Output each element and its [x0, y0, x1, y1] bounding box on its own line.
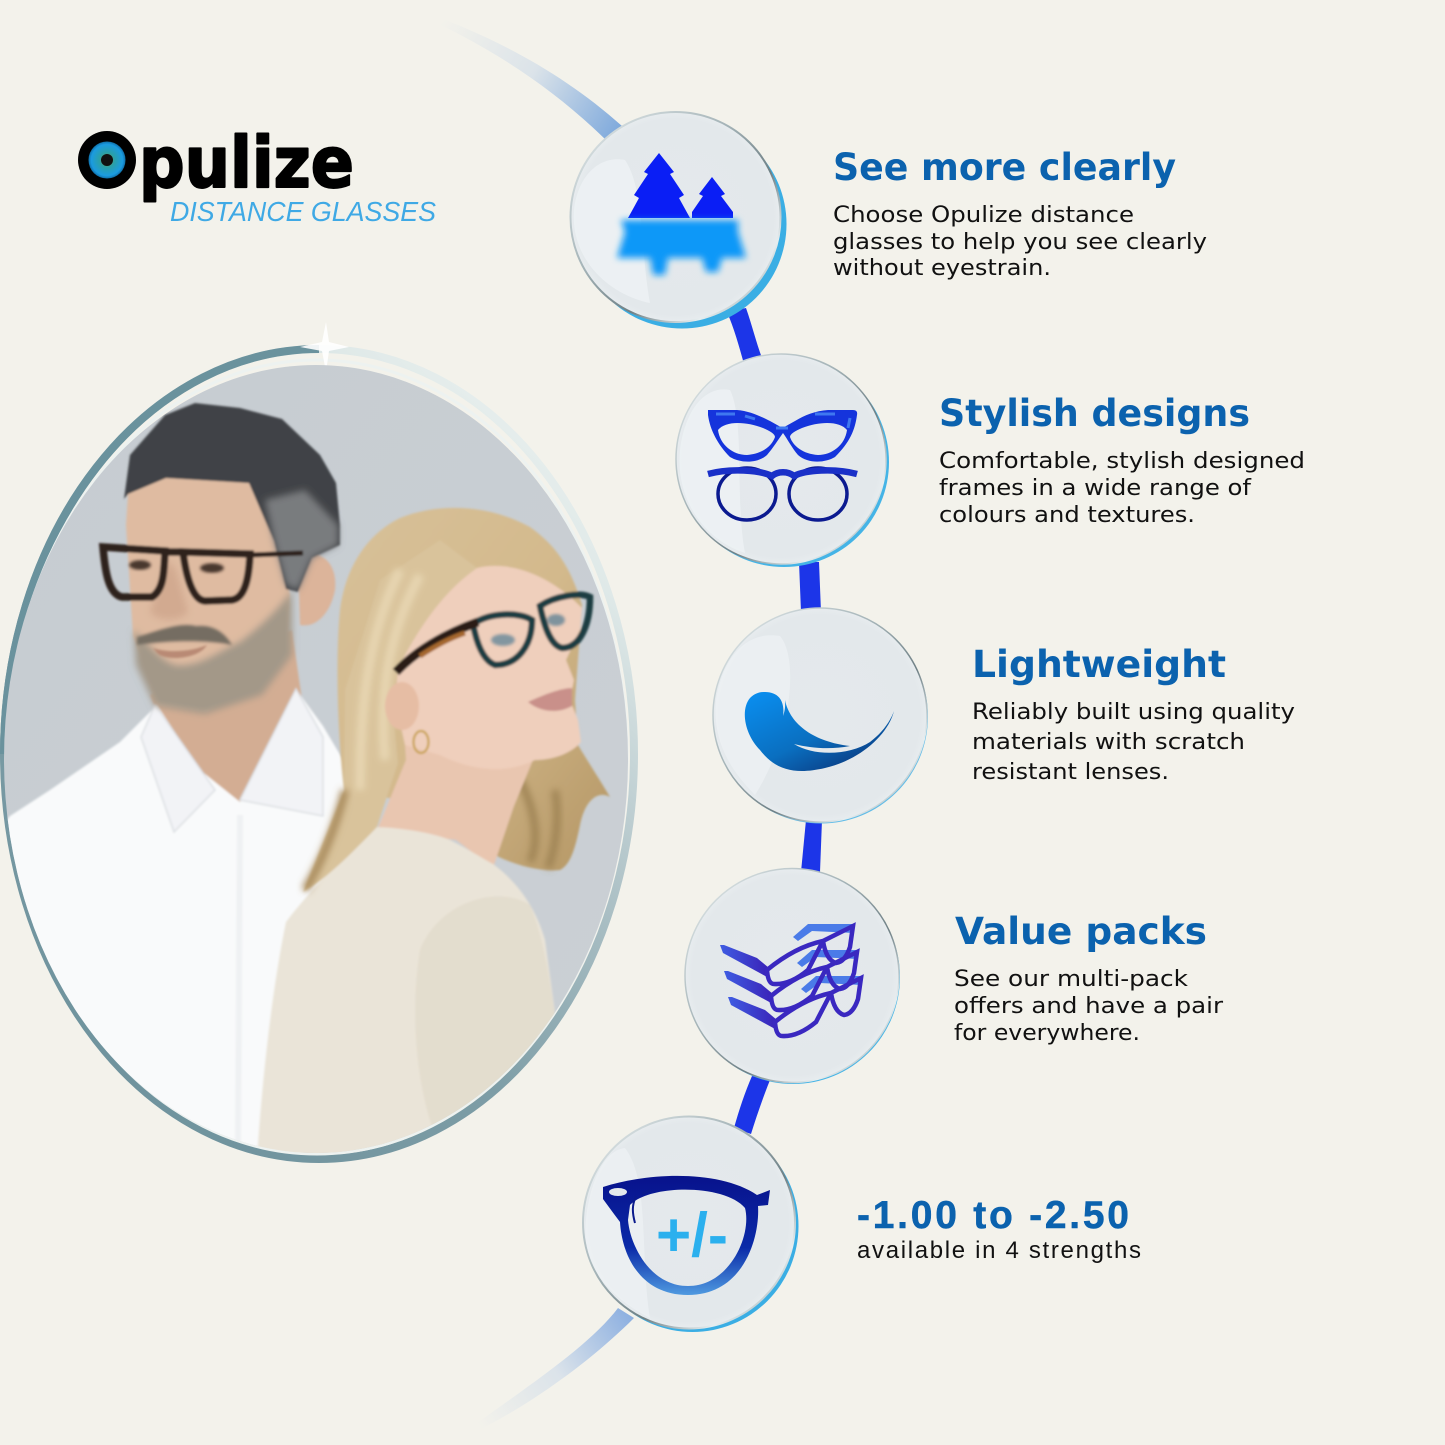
woman	[257, 508, 610, 1160]
icon: glasses with plus minus	[603, 1176, 770, 1295]
lens 1: see more clearly	[570, 112, 786, 328]
icon: cat-eye glasses	[708, 410, 857, 462]
icon: stack of glasses	[720, 924, 862, 1036]
lens 3: lightweight	[713, 608, 928, 824]
lens 2: stylish designs	[676, 354, 889, 567]
man and woman illustration	[0, 403, 610, 1165]
text: value packs body: See our multi-pack	[954, 967, 1188, 992]
arc: top connector fading in	[430, 14, 622, 140]
icon: feather	[745, 692, 894, 771]
connector: lens 3 to lens 4	[801, 820, 822, 872]
heading: see more clearly: See more clearly	[833, 146, 1176, 189]
text: value packs body: for everywhere.	[954, 1021, 1140, 1046]
text: value packs body	[954, 967, 1224, 1046]
text: see more clearly body: Choose Opulize distance	[833, 203, 1134, 228]
heading: strengths range: -1.00 to -2.50	[857, 1194, 1129, 1237]
heading: lightweight: Lightweight	[972, 643, 1226, 686]
text: stylish designs body: colours and textures.	[939, 503, 1195, 528]
icon: glasses with plus minus: +/-	[656, 1201, 728, 1270]
connector: lens 4 to lens 5	[734, 1076, 770, 1134]
icon: eye in logo O	[78, 131, 136, 189]
icon: sharp and blurred trees	[617, 153, 746, 275]
photo background	[4, 365, 628, 1153]
connector: lens 1 to lens 2	[727, 308, 762, 364]
logo	[78, 122, 354, 204]
connector: lens 2 to lens 3	[799, 562, 821, 612]
heading: stylish designs: Stylish designs	[939, 392, 1250, 435]
icon: sparkle on ring	[300, 322, 349, 372]
arc: bottom connector fading out	[470, 1308, 634, 1432]
text: lightweight body	[972, 700, 1295, 785]
text: see more clearly body: without eyestrain.	[833, 256, 1051, 281]
text: see more clearly body	[833, 203, 1207, 281]
photo panel: couple wearing glasses	[0, 322, 634, 1165]
heading: value packs: Value packs	[955, 910, 1207, 953]
text: value packs body: offers and have a pair	[954, 994, 1224, 1019]
icon: round glasses	[708, 468, 857, 520]
text: lightweight body: resistant lenses.	[972, 760, 1169, 785]
logo subtitle: DISTANCE GLASSES	[170, 196, 437, 227]
logo wordmark: pulize	[139, 122, 354, 204]
text: strengths note: available in 4 strengths	[857, 1237, 1141, 1264]
text: see more clearly body: glasses to help you see clearly	[833, 230, 1207, 255]
text: stylish designs body	[939, 449, 1305, 528]
lens 5: strengths	[583, 1116, 798, 1332]
lens 4: value packs	[685, 868, 900, 1084]
man's glasses	[103, 547, 250, 601]
woman's glasses	[473, 595, 590, 665]
text: lightweight body: Reliably built using quality	[972, 700, 1295, 725]
text: lightweight body: materials with scratch	[972, 730, 1245, 755]
text: stylish designs body: frames in a wide range of	[939, 476, 1252, 501]
text: stylish designs body: Comfortable, stylish designed	[939, 449, 1305, 474]
man	[0, 403, 360, 1165]
